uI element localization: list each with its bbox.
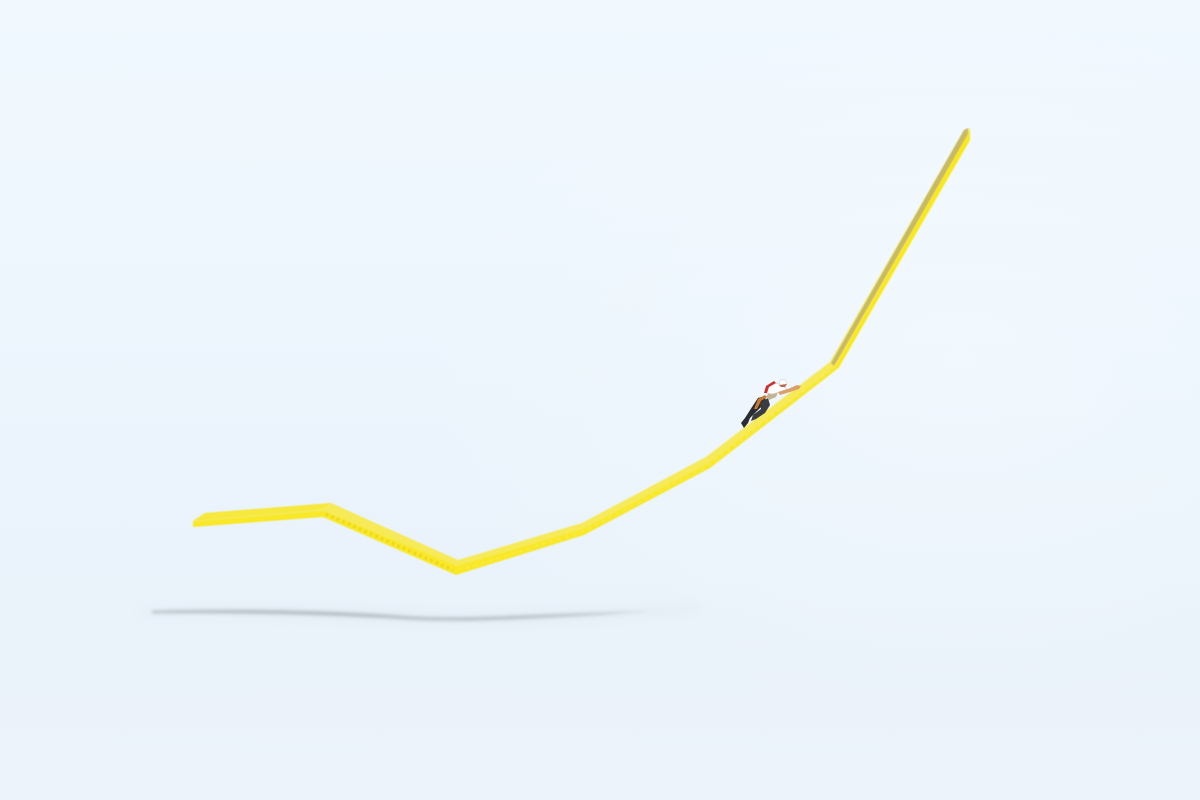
top face	[193, 128, 970, 566]
yellow line chart	[193, 128, 970, 575]
face	[779, 384, 787, 387]
head	[779, 379, 787, 387]
upper rising segment shaded side	[831, 128, 968, 366]
front face	[193, 130, 970, 575]
hip strap	[754, 395, 767, 409]
red strap	[764, 381, 776, 393]
cast shadow	[140, 606, 700, 622]
arm	[778, 385, 801, 395]
left flat segment tint	[193, 503, 331, 521]
bright edge on upper segment	[835, 130, 970, 369]
torso	[766, 383, 787, 394]
waist shading	[766, 391, 778, 400]
front leg	[751, 398, 770, 421]
peg dots on front face	[326, 514, 453, 570]
climber figure	[741, 379, 801, 428]
rear leg	[741, 396, 766, 428]
